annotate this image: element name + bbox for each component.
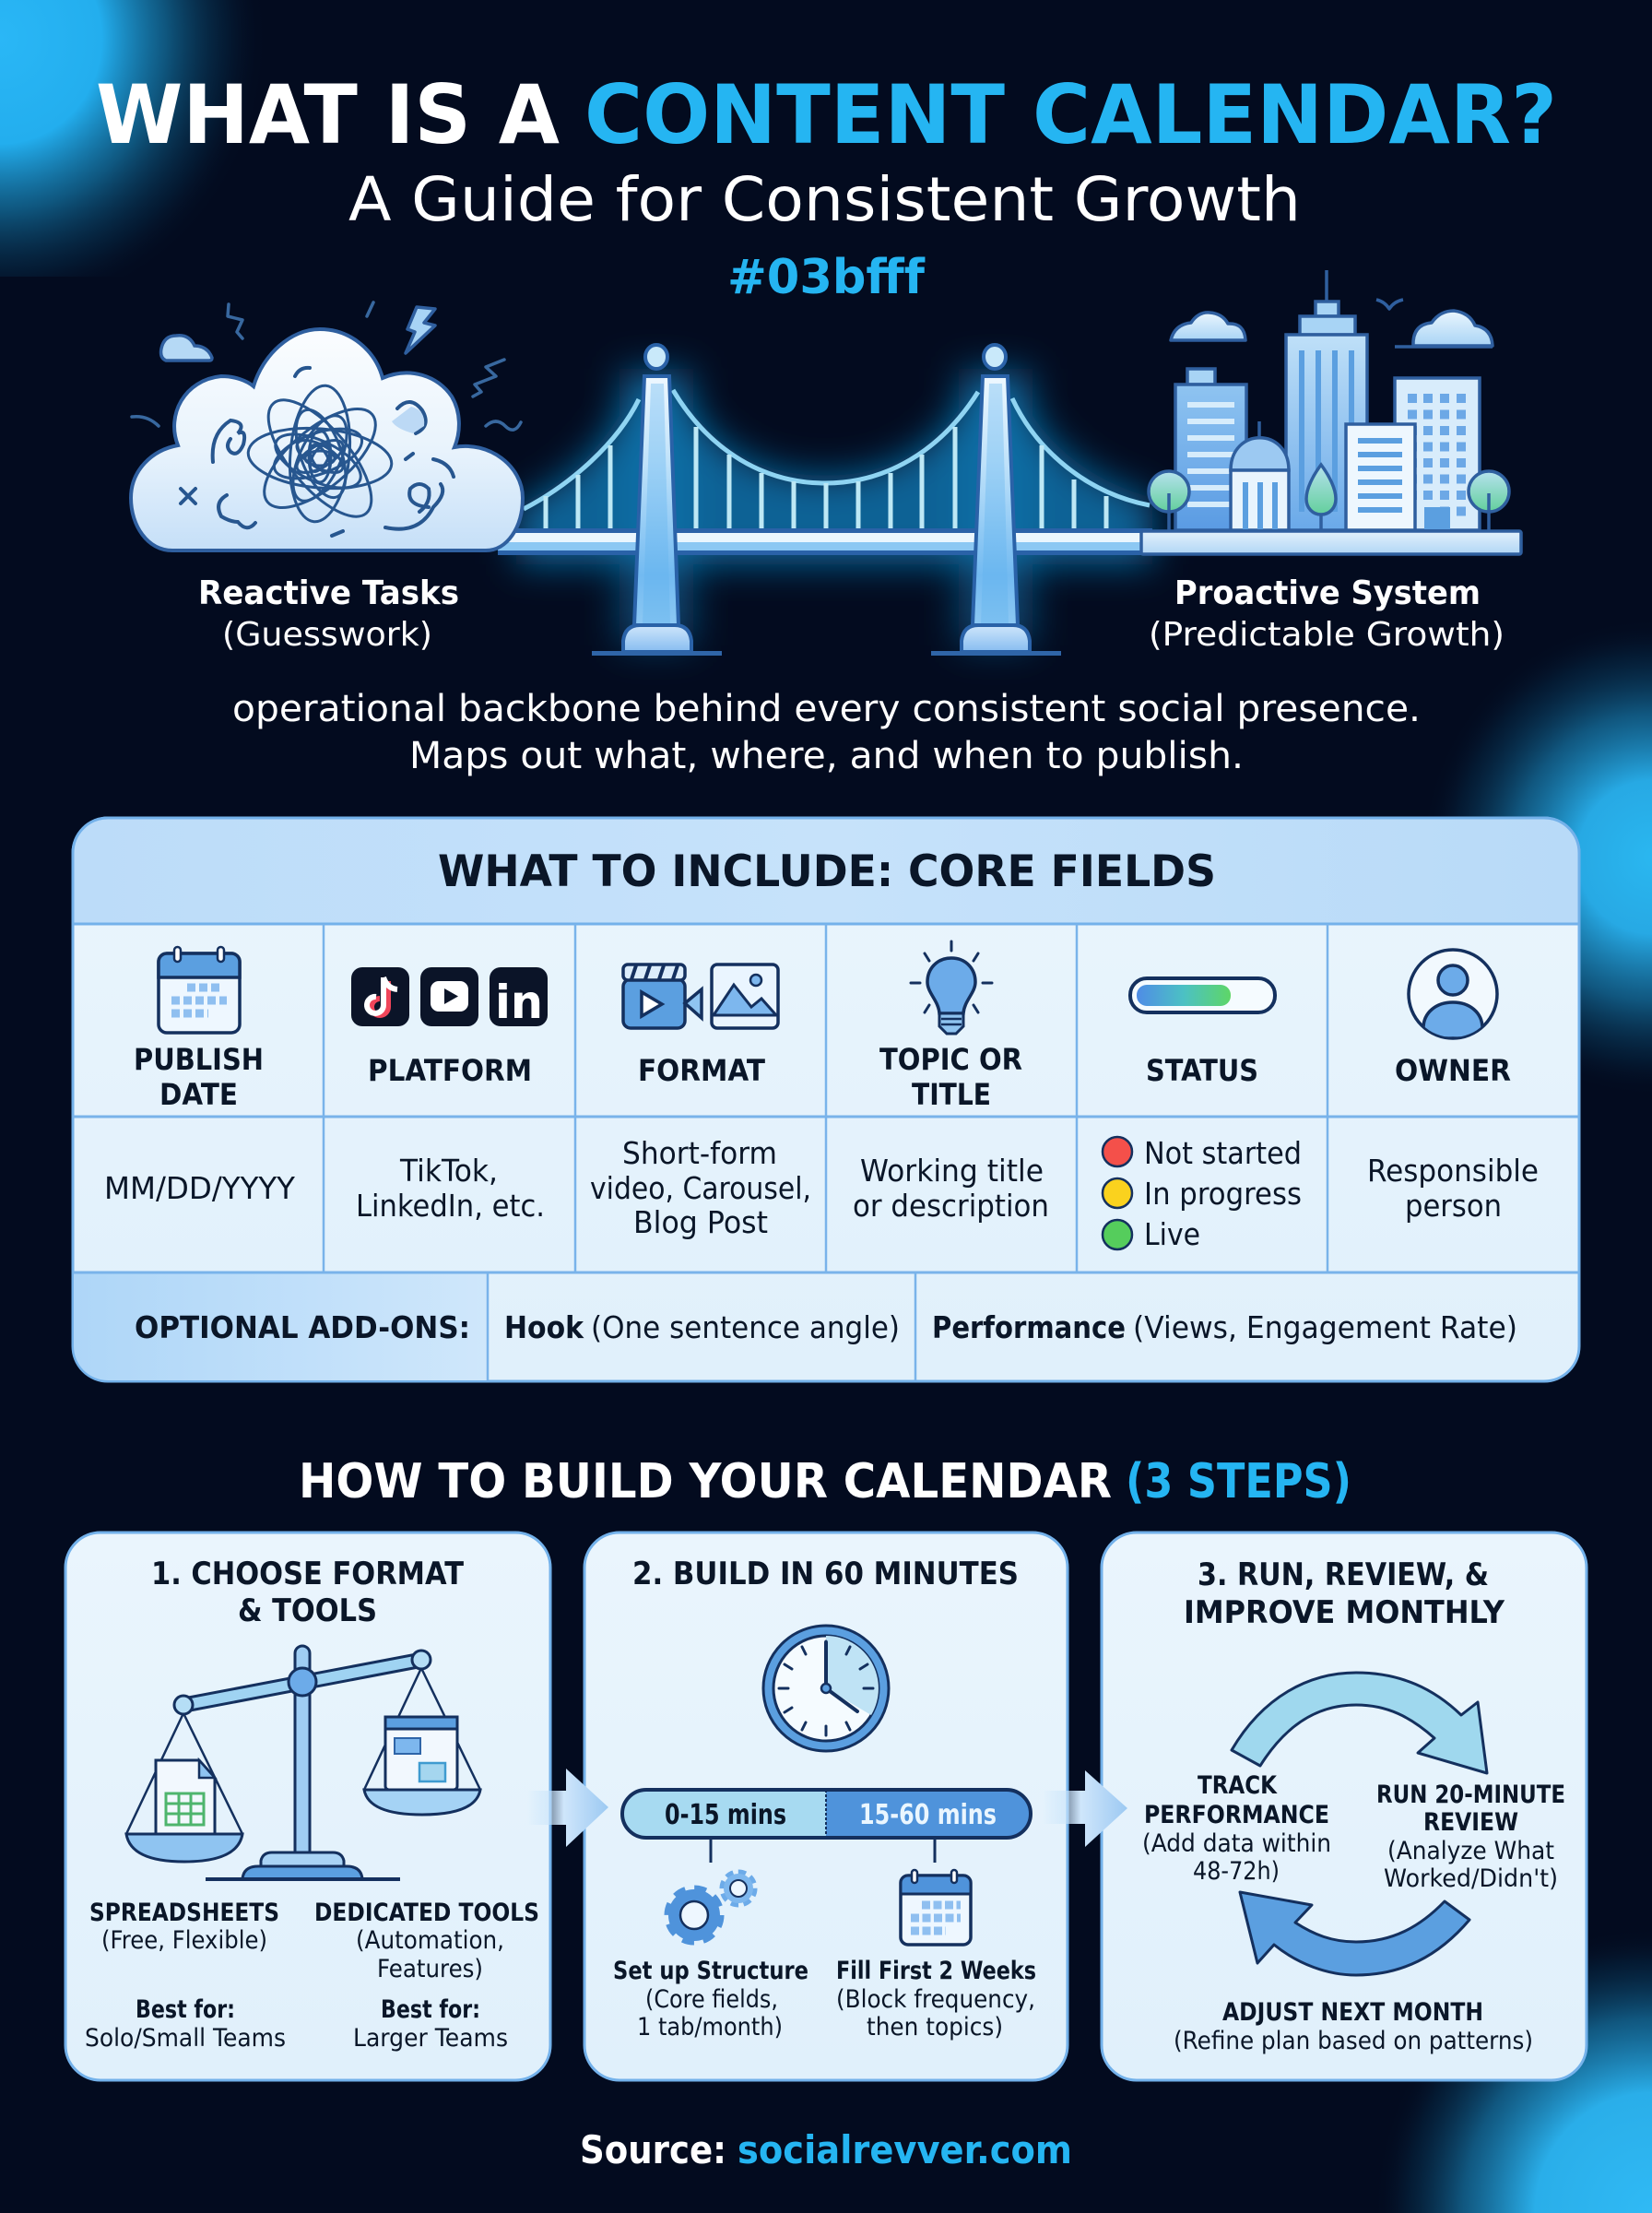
- field label: DATE: [159, 1077, 238, 1112]
- field label: PUBLISH: [134, 1042, 264, 1077]
- spreadsheets option: (Free, Flexible): [101, 1926, 267, 1955]
- suspension cables: [524, 390, 1150, 509]
- icon: calendar: [901, 1870, 971, 1945]
- field value: topic: Working title: [860, 1153, 1044, 1189]
- left pan: [126, 1713, 242, 1834]
- timeline bar: 0-15 mins: [665, 1799, 786, 1831]
- icon: balance scale: [126, 1646, 480, 1879]
- field label: [879, 1042, 1022, 1112]
- beam: [183, 1653, 423, 1711]
- milestone: set up structure: (Core fields,: [645, 1985, 778, 2014]
- source line: Source:: [580, 2127, 726, 2172]
- bridge deck: [498, 528, 1152, 555]
- field value: date: MM/DD/YYYY: [104, 1170, 296, 1206]
- cycle step: run review: (Analyze What: [1387, 1837, 1554, 1865]
- right pan: [364, 1668, 480, 1790]
- field value: owner: [1367, 1153, 1539, 1224]
- timeline bar: 15-60 mins: [859, 1799, 997, 1831]
- cycle step: adjust next month: (Refine plan based on patterns): [1174, 2027, 1533, 2055]
- illustration labels: [198, 574, 1504, 654]
- icon: platforms: in: [495, 976, 543, 1029]
- cycle step: track performance: TRACK: [1198, 1771, 1278, 1800]
- title: [96, 67, 1557, 162]
- title: CONTENT CALENDAR?: [584, 67, 1557, 162]
- cycle step: adjust next month: ADJUST NEXT MONTH: [1222, 1998, 1483, 2027]
- cycle step: track performance: (Add data within: [1142, 1829, 1331, 1858]
- lightning bolt: [406, 307, 435, 353]
- post and base: [295, 1646, 310, 1858]
- left tower: [592, 345, 722, 656]
- milestone: fill first 2 weeks: (Block frequency,: [836, 1985, 1035, 2014]
- cycle step: adjust next month: [1174, 1998, 1533, 2055]
- milestone: fill first 2 weeks: Fill First 2 Weeks: [836, 1957, 1036, 1985]
- field value: topic: [853, 1153, 1049, 1224]
- arrow: step 2 to step 3: [1043, 1770, 1127, 1847]
- arrow: step 1 to step 2: [527, 1769, 608, 1847]
- panel: step 3: [1102, 1533, 1587, 2080]
- section heading: HOW TO BUILD YOUR CALENDAR: [299, 1454, 1112, 1509]
- dedicated tools option: Larger Teams: [353, 2024, 508, 2053]
- field label: OWNER: [1395, 1053, 1511, 1088]
- milestone: set up structure: Set up Structure: [613, 1957, 808, 1985]
- field label: STATUS: [1146, 1053, 1258, 1088]
- milestone: fill first 2 weeks: then topics): [867, 2013, 1003, 2041]
- subtitle: A Guide for Consistent Growth: [348, 164, 1301, 235]
- cycle step: run review: REVIEW: [1423, 1808, 1518, 1837]
- icon: owner: [1409, 950, 1497, 1038]
- timeline connectors: [711, 1838, 935, 1863]
- table header: [73, 818, 1579, 924]
- cycle step: run review: RUN 20-MINUTE: [1376, 1781, 1565, 1809]
- optional add-ons row: Performance: [932, 1309, 1126, 1345]
- optional add-ons row: [135, 1309, 1517, 1345]
- icon: status progress bar: [1130, 978, 1275, 1012]
- source line: [580, 2127, 1072, 2172]
- field value: platform: TikTok,: [399, 1153, 498, 1189]
- optional add-ons row: (One sentence angle): [591, 1309, 900, 1345]
- field value: format: [590, 1135, 811, 1240]
- arrow: cycle bottom: [1240, 1892, 1469, 1975]
- arrow: cycle top: [1232, 1673, 1487, 1773]
- field value: platform: [356, 1153, 545, 1224]
- icon: clock: [763, 1626, 889, 1751]
- step 1 heading: & TOOLS: [238, 1592, 377, 1629]
- field value: status legend: [1103, 1135, 1302, 1252]
- sky clouds and bird: [1171, 300, 1493, 347]
- milestone: set up structure: 1 tab/month): [637, 2013, 783, 2041]
- dedicated tools option: (Automation,: [356, 1926, 504, 1955]
- city illustration: [1141, 270, 1521, 554]
- table title: WHAT TO INCLUDE: CORE FIELDS: [438, 846, 1216, 897]
- cycle step: run review: Worked/Didn't): [1384, 1864, 1558, 1893]
- field value: status legend: Live: [1144, 1216, 1200, 1252]
- source line: socialrevver.com: [738, 2127, 1072, 2172]
- field value: format: Blog Post: [633, 1204, 768, 1240]
- spreadsheets option: Best for:: [136, 1995, 235, 2024]
- illustration labels: (Predictable Growth): [1149, 616, 1504, 654]
- dedicated tools option: [314, 1899, 539, 2053]
- small doodles: [181, 368, 454, 536]
- field value: owner: person: [1405, 1188, 1502, 1224]
- step 1 heading: [151, 1556, 465, 1629]
- dedicated tools option: Best for:: [381, 1995, 480, 2024]
- cycle step: track performance: [1142, 1771, 1331, 1886]
- front block: [1346, 424, 1415, 530]
- small cloud: [161, 336, 212, 361]
- timeline bar: [622, 1790, 1031, 1838]
- icon: calendar: [159, 947, 240, 1033]
- icon: platforms: [351, 967, 548, 1029]
- skyscraper: [1286, 270, 1367, 530]
- step 3 heading: 3. RUN, REVIEW, &: [1198, 1556, 1489, 1593]
- section heading: (3 STEPS): [1126, 1454, 1351, 1509]
- field label: TITLE: [912, 1077, 991, 1112]
- dome building: [1231, 421, 1289, 530]
- description text: [232, 688, 1421, 777]
- scribble: [246, 383, 394, 532]
- field value: status legend: Not started: [1144, 1135, 1302, 1171]
- cycle step: run review: [1376, 1781, 1565, 1893]
- trees: [1149, 465, 1509, 530]
- step 2 heading: 2. BUILD IN 60 MINUTES: [632, 1556, 1019, 1592]
- title: WHAT IS A: [96, 67, 560, 162]
- step 1 heading: 1. CHOOSE FORMAT: [151, 1556, 465, 1592]
- table grid: [73, 924, 1579, 1381]
- colour hashtag: #03bfff: [727, 250, 926, 305]
- field value: format: video, Carousel,: [590, 1170, 811, 1206]
- dedicated tools option: DEDICATED TOOLS: [314, 1899, 539, 1927]
- right grid block: [1395, 378, 1480, 530]
- field label: [134, 1042, 264, 1112]
- right tower: [931, 345, 1061, 656]
- stress marks: [132, 302, 521, 430]
- field value: owner: Responsible: [1367, 1153, 1539, 1189]
- panel: step 1: [65, 1533, 550, 2080]
- optional add-ons row: Hook: [504, 1309, 584, 1345]
- field value: status legend: In progress: [1144, 1176, 1302, 1212]
- illustration labels: Proactive System: [1174, 574, 1481, 612]
- milestone: fill first 2 weeks: [836, 1957, 1036, 2041]
- field label: PLATFORM: [368, 1053, 532, 1088]
- description text: operational backbone behind every consistent social presence.: [232, 688, 1421, 730]
- milestone: set up structure: [613, 1957, 808, 2041]
- optional add-ons row: (Views, Engagement Rate): [1133, 1309, 1517, 1345]
- cycle step: track performance: 48-72h): [1193, 1857, 1280, 1886]
- chaotic cloud illustration: [131, 302, 523, 550]
- step 3 heading: [1184, 1556, 1504, 1631]
- illustration labels: (Guesswork): [222, 616, 432, 654]
- icon: video and image: [623, 964, 778, 1028]
- left tower block: [1175, 369, 1246, 530]
- field value: platform: LinkedIn, etc.: [356, 1188, 545, 1224]
- hangers: [546, 427, 1106, 530]
- step 3 heading: IMPROVE MONTHLY: [1184, 1594, 1504, 1631]
- optional add-ons row: OPTIONAL ADD-ONS:: [135, 1309, 470, 1345]
- spreadsheets option: [85, 1899, 286, 2053]
- field label: TOPIC OR: [879, 1042, 1022, 1077]
- bridge glow: [512, 369, 1157, 645]
- icon: gears: [669, 1873, 754, 1940]
- icon: lightbulb: [911, 941, 992, 1034]
- dedicated tools option: Features): [377, 1955, 483, 1983]
- spreadsheets option: SPREADSHEETS: [89, 1899, 279, 1927]
- panel: core fields table: [73, 818, 1579, 1381]
- panel: step 2: [584, 1533, 1068, 2080]
- ground platform: [1141, 531, 1521, 554]
- description text: Maps out what, where, and when to publish.: [409, 735, 1244, 777]
- field value: topic: or description: [853, 1188, 1049, 1224]
- illustration labels: Reactive Tasks: [198, 574, 459, 612]
- field value: format: Short-form: [622, 1135, 777, 1171]
- cycle step: track performance: PERFORMANCE: [1144, 1801, 1329, 1829]
- optional add-ons label cell: [74, 1272, 488, 1380]
- bridge illustration: [498, 345, 1157, 656]
- field label: FORMAT: [638, 1053, 765, 1088]
- spreadsheets option: Solo/Small Teams: [85, 2024, 286, 2053]
